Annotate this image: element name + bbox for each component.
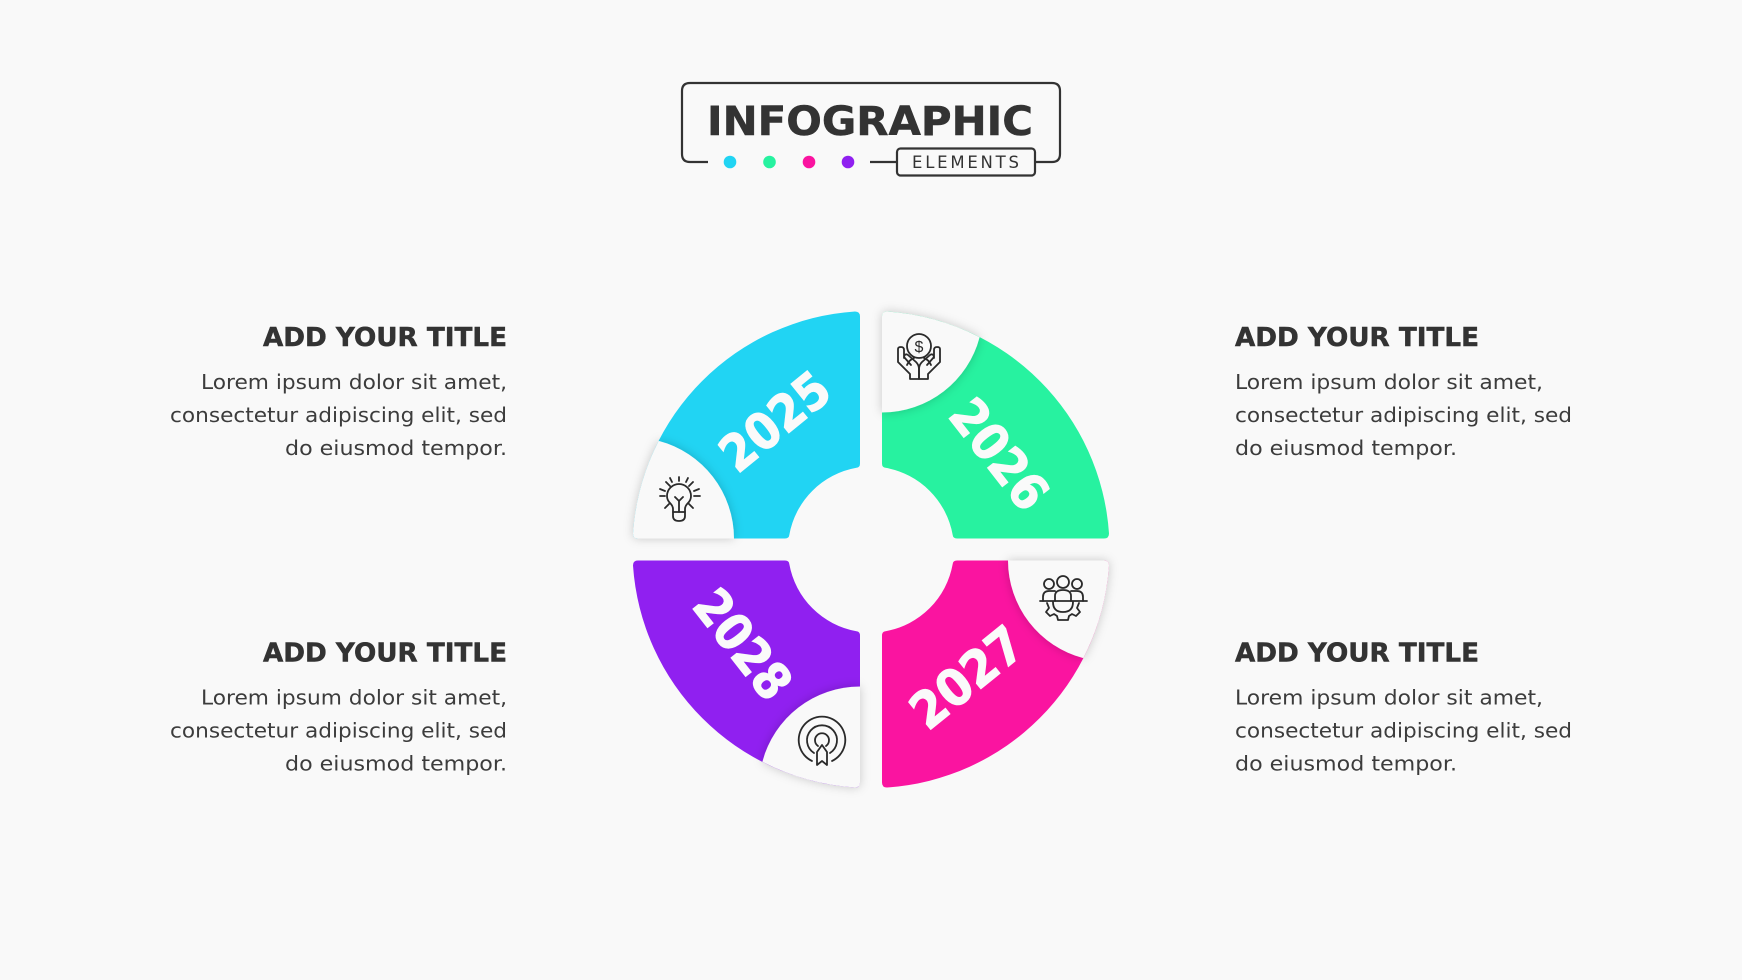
body text <box>1235 370 1572 460</box>
colour dots <box>724 156 854 168</box>
year label: 2026 <box>938 387 1060 522</box>
magenta sector <box>882 560 1109 788</box>
badge frame <box>682 83 1060 162</box>
body text: consectetur adipiscing elit, sed <box>170 403 507 427</box>
year label: 2025 <box>708 360 842 484</box>
white icon tab <box>1008 560 1109 658</box>
icon: hands holding coin <box>898 334 940 379</box>
heading: ADD YOUR TITLE <box>1235 323 1479 353</box>
icon: target with marker <box>799 717 845 765</box>
body text: consectetur adipiscing elit, sed <box>1235 718 1572 742</box>
body text: Lorem ipsum dolor sit amet, <box>1235 370 1543 394</box>
body text: do eiusmod tempor. <box>285 436 507 460</box>
icon: team and gear <box>1040 576 1087 620</box>
heading: ADD YOUR TITLE <box>263 323 507 353</box>
text block: top left <box>170 323 507 460</box>
body text: Lorem ipsum dolor sit amet, <box>201 686 507 710</box>
icon: hands holding coin: $ <box>915 339 924 356</box>
icon: light bulb <box>660 477 700 521</box>
body text: Lorem ipsum dolor sit amet, <box>201 370 507 394</box>
body text: do eiusmod tempor. <box>285 752 507 776</box>
heading: ADD YOUR TITLE <box>263 638 507 668</box>
heading: INFOGRAPHIC: INFOGRAPHIC <box>707 99 1033 145</box>
title badge <box>682 83 1060 176</box>
year label: 2027 <box>899 615 1036 741</box>
segment: 2028 <box>633 560 860 788</box>
elements tag <box>897 148 1035 176</box>
body text <box>1235 686 1572 776</box>
body text: do eiusmod tempor. <box>1235 752 1457 776</box>
segment: 2027 <box>882 560 1109 788</box>
body text: Lorem ipsum dolor sit amet, <box>1235 686 1543 710</box>
white icon tab <box>633 441 734 538</box>
white icon tab <box>762 686 860 788</box>
segment: 2026 <box>882 312 1109 538</box>
body text <box>170 370 507 460</box>
text block: top right <box>1235 323 1572 460</box>
body text: consectetur adipiscing elit, sed <box>170 718 507 742</box>
body text: do eiusmod tempor. <box>1235 436 1457 460</box>
heading: ADD YOUR TITLE <box>1235 638 1479 668</box>
year label: 2028 <box>681 578 803 711</box>
text block: bottom left <box>170 638 507 776</box>
text block: bottom right <box>1235 638 1572 776</box>
body text <box>170 686 507 776</box>
white icon tab <box>882 312 980 412</box>
green sector <box>882 312 1109 538</box>
purple sector <box>633 560 860 788</box>
elements tag: ELEMENTS <box>912 153 1019 172</box>
cyan sector <box>633 312 860 538</box>
body text: consectetur adipiscing elit, sed <box>1235 403 1572 427</box>
segment: 2025 <box>633 312 860 538</box>
